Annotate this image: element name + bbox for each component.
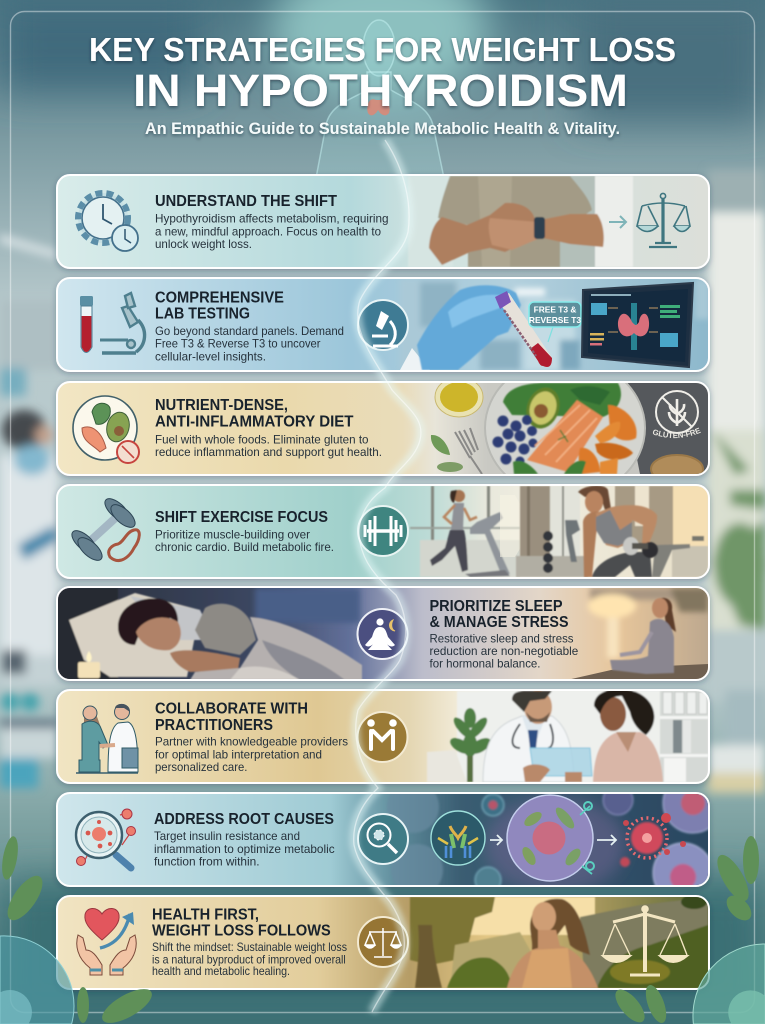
photo: sleeping woman (58, 588, 362, 680)
icon badge: magnifier (358, 814, 408, 864)
heading (430, 598, 568, 631)
panel: understand the shift (57, 175, 709, 268)
photo: doctor and patient (427, 689, 708, 782)
callout: free T3 (529, 302, 581, 342)
gym interior (516, 486, 708, 577)
body text (155, 325, 344, 363)
fork (455, 428, 482, 474)
body text: function from within. (154, 855, 260, 868)
icon: magnifier and cells (76, 809, 136, 868)
body text: Go beyond standard panels. Demand (155, 325, 344, 338)
tablet (582, 283, 693, 367)
icon: microscope (100, 293, 145, 353)
callout: free T3: FREE T3 & (534, 304, 576, 314)
heading (152, 906, 331, 940)
heading: UNDERSTAND THE SHIFT (155, 193, 337, 210)
arrow (609, 216, 626, 228)
icon: scales (637, 193, 690, 247)
icon: test tube (80, 296, 93, 352)
blurred plant and window on the right (708, 170, 765, 793)
gluten-free badge: GLUTEN-FREE (652, 428, 701, 438)
icon: food plate (73, 396, 139, 463)
body text: unlock weight loss. (155, 238, 252, 251)
heading: HEALTH FIRST, (152, 906, 259, 923)
heading (155, 700, 308, 734)
body text: Fuel with whole foods. Eliminate gluten to (155, 433, 369, 446)
decoration: bottom-left cells and leaves (0, 835, 157, 1024)
decoration: bottom-right cells and leaves (610, 836, 765, 1024)
photo: cellular illustration (400, 794, 708, 885)
body text (155, 736, 348, 774)
blurred lab worker on the left (0, 235, 60, 788)
body text (155, 433, 382, 459)
title: IN HYPOTHYROIDISM (133, 65, 628, 116)
plate (484, 383, 646, 474)
translucent body figure with thyroid (316, 20, 444, 178)
panel: collaborate with practitioners (57, 689, 709, 783)
panel: sleep and stress (57, 587, 710, 680)
body text: personalized care. (155, 761, 247, 774)
heading: PRACTITIONERS (155, 717, 273, 734)
icon: cream scales over photo (603, 906, 687, 975)
body text: a new, mindful approach. Focus on health to (155, 225, 381, 238)
gluten-free badge (652, 390, 701, 438)
icon badge: scales (358, 917, 408, 967)
heading: SHIFT EXERCISE FOCUS (155, 509, 328, 526)
body text: Target insulin resistance and (154, 830, 300, 843)
panel: anti-inflammatory diet (53, 380, 714, 481)
virus (631, 822, 663, 854)
body text (155, 213, 388, 251)
body text: cellular-level insights. (155, 350, 266, 363)
photo: meditating woman at sunset (567, 588, 710, 680)
body text (154, 830, 335, 868)
test tube (495, 291, 552, 367)
oil glass (434, 383, 484, 418)
body text: for hormonal balance. (430, 658, 540, 671)
body text: is a natural byproduct of improved overall (152, 953, 346, 966)
glowing ribbon (354, 140, 421, 1012)
body text: reduction are non-negotiable (430, 645, 578, 658)
icon: heart and caring hands (77, 908, 136, 975)
heading: & MANAGE STRESS (430, 614, 568, 631)
panel: shift exercise focus (57, 485, 709, 578)
title (89, 31, 676, 116)
body text: Restorative sleep and stress (430, 632, 574, 645)
heading: LAB TESTING (155, 306, 250, 323)
title: KEY STRATEGIES FOR WEIGHT LOSS (89, 31, 676, 68)
icon: dumbbell and band (68, 495, 139, 564)
subtitle: An Empathic Guide to Sustainable Metabolic Health & Vitality. (145, 119, 620, 138)
heading (155, 397, 354, 431)
heading (155, 289, 284, 323)
body text: Hypothyroidism affects metabolism, requiring (155, 213, 388, 226)
panel: health first (57, 895, 709, 989)
body text: health and metabolic healing. (152, 965, 290, 978)
body text: reduce inflammation and support gut health. (155, 446, 382, 459)
icon badge: two people (358, 712, 408, 762)
body text: for optimal lab interpretation and (155, 748, 322, 761)
body text (152, 941, 347, 978)
heading: COMPREHENSIVE (155, 289, 284, 306)
body text: Free T3 & Reverse T3 to uncover (155, 338, 321, 351)
large cell (507, 795, 593, 881)
body text (430, 632, 578, 671)
body text: Partner with knowledgeable providers (155, 736, 348, 749)
icon badge: microscope (358, 300, 408, 350)
photo: woman outdoors at sunset (410, 895, 708, 988)
treadmill runner (410, 486, 520, 577)
body text: Prioritize muscle-building over (155, 528, 310, 541)
panel: address root causes (54, 791, 712, 891)
heading: COLLABORATE WITH (155, 700, 308, 717)
heading: NUTRIENT-DENSE, (155, 397, 288, 414)
arrows (490, 835, 616, 845)
photo: person checking watch (408, 176, 633, 267)
icon: handshake figures (76, 704, 138, 773)
icon: gear and clock (78, 193, 138, 251)
heading: ADDRESS ROOT CAUSES (154, 811, 334, 828)
panel: comprehensive lab testing (57, 278, 710, 371)
body text (155, 528, 334, 554)
callout: free T3: REVERSE T3 (529, 315, 581, 325)
photo: gloved hand, tube and tablet (400, 279, 710, 370)
photo: healthy plate (430, 383, 708, 474)
icon badge: meditation and moon (358, 609, 408, 659)
body text: inflammation to optimize metabolic (154, 843, 335, 856)
heading: WEIGHT LOSS FOLLOWS (152, 923, 331, 940)
strength woman (578, 486, 658, 577)
heading: ANTI-INFLAMMATORY DIET (155, 414, 354, 431)
bowl (650, 454, 704, 474)
photo: cardio to strength (410, 486, 708, 577)
chevron (500, 511, 520, 557)
icon badge: dumbbell (358, 506, 408, 556)
body text: chronic cardio. Build metabolic fire. (155, 541, 334, 554)
heading: PRIORITIZE SLEEP (430, 598, 562, 615)
body text: Shift the mindset: Sustainable weight loss (152, 941, 347, 954)
